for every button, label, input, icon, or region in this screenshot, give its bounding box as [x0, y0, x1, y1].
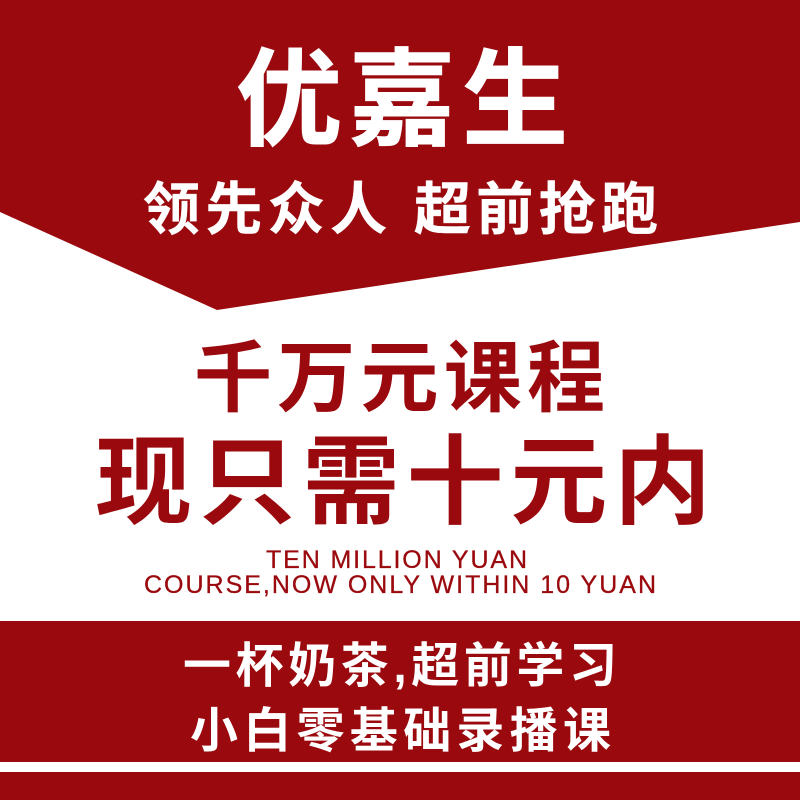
- bottom banner: [0, 621, 800, 762]
- bottom banner text: 一杯奶茶,超前学习: [183, 640, 617, 693]
- title: 优嘉生: [236, 42, 568, 160]
- footer strip: [0, 772, 800, 800]
- bottom banner text: 小白零基础录播课: [190, 705, 611, 758]
- bottom banner text: [183, 640, 617, 758]
- top banner with pointed bottom: [0, 0, 800, 310]
- english caption: [144, 546, 656, 599]
- headline: course: 千万元课程: [194, 334, 605, 422]
- subtitle: 领先众人 超前抢跑: [143, 178, 658, 242]
- headline: price: 现只需十元内: [95, 428, 711, 537]
- english caption: COURSE,NOW ONLY WITHIN 10 YUAN: [144, 571, 656, 599]
- english caption: TEN MILLION YUAN: [266, 546, 527, 574]
